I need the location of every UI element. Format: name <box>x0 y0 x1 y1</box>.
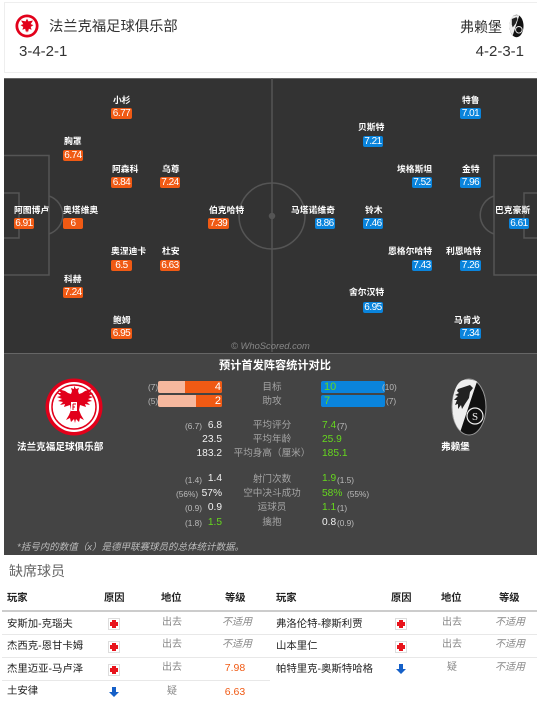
stat rows: 183.2 <box>196 448 222 459</box>
player: 奥涅迪卡: 奥涅迪卡 <box>111 246 146 256</box>
icon: Frankfurt crest large <box>46 378 102 436</box>
table: absent players left: 6.63 <box>225 686 245 698</box>
player: 乌尊 <box>160 164 180 188</box>
table: absent players right: 出去 <box>442 639 462 650</box>
stat rows: (1.8) <box>185 518 202 528</box>
table: absent players left: 杰里迈亚-马卢泽 <box>7 664 83 675</box>
panel: match header <box>4 2 537 73</box>
player: 马塔诺维奇: 马塔诺维奇 <box>291 205 335 215</box>
bar: away goals: 10 <box>324 381 336 393</box>
stat rows: (6.7) <box>185 421 202 431</box>
player: 舍尔汉特 <box>349 287 384 313</box>
stat rows: (56%) <box>176 489 198 499</box>
stat rows: 6.8 <box>208 420 222 431</box>
player: 杜安: 杜安 <box>162 246 180 256</box>
stat: bar labels: 目标 <box>262 382 282 393</box>
player: 胸罩: 6.74 <box>64 150 82 161</box>
player: 金特: 金特 <box>462 164 480 174</box>
icon: Freiburg crest large: S <box>472 411 478 423</box>
player: 鲍姆: 鲍姆 <box>113 315 131 325</box>
player: 胸罩: 胸罩 <box>64 136 82 146</box>
stat: bar labels: 助攻 <box>262 396 282 407</box>
table: absent players right: 帕特里克-奥斯特哈格 <box>276 664 373 675</box>
stat rows: (1) <box>337 503 347 513</box>
table: absent players right: 不适用 <box>495 662 525 673</box>
stat rows: (7) <box>337 421 347 431</box>
bar: away goals <box>321 381 385 393</box>
player: 特鲁: 7.01 <box>462 108 479 119</box>
stat rows: 平均身高（厘米） <box>234 448 310 459</box>
player: 乌尊: 乌尊 <box>162 164 180 174</box>
heading: absent players: 缺席球员 <box>9 563 65 579</box>
stat rows: 0.9 <box>208 502 222 513</box>
player: 奥塔维奥: 奥塔维奥 <box>63 205 98 215</box>
player: 铃木: 7.46 <box>364 218 382 229</box>
player: 恩格尔哈特 <box>388 246 432 271</box>
player: 伯克哈特: 伯克哈特 <box>209 205 244 215</box>
stat rows: (1.5) <box>337 475 354 485</box>
bar: away assists <box>321 395 385 407</box>
table: absent players left: 杰西克-恩甘卡姆 <box>7 641 83 652</box>
icon: Frankfurt crest small <box>16 14 38 38</box>
player: 马肯戈 <box>454 315 481 339</box>
table: absent players right: 疑 <box>447 662 457 673</box>
away formation: 4-2-3-1 <box>476 43 524 60</box>
table: absent players right: 玩家 <box>276 593 297 604</box>
player: 巴克豪斯: 6.61 <box>510 218 528 229</box>
watermark: © WhoScored.com <box>231 340 310 351</box>
stat rows: 1.9 <box>322 473 336 484</box>
player: 贝斯特 <box>358 122 384 147</box>
player: 埃格斯坦 <box>397 164 432 188</box>
pitch <box>4 78 537 353</box>
table: absent players left: 土安律 <box>7 686 38 697</box>
stat rows: 0.8 <box>322 517 336 528</box>
player: 利恩哈特 <box>446 246 481 271</box>
player: 杜安 <box>160 246 180 271</box>
table: absent players right: 不适用 <box>495 617 525 628</box>
player: 恩格尔哈特: 7.43 <box>413 260 431 271</box>
player: 马塔诺维奇 <box>291 205 335 229</box>
bar: away assists: 7 <box>324 395 330 407</box>
table: absent players right <box>270 592 537 675</box>
player: 舍尔汉特: 舍尔汉特 <box>349 287 384 297</box>
table: absent players right: 山本里仁 <box>276 641 318 652</box>
stat: bar labels: (7) <box>148 382 158 392</box>
player: 阿图博卢: 阿图博卢 <box>14 205 49 215</box>
player: 阿森科 <box>111 164 138 188</box>
stat rows: 185.1 <box>322 448 348 459</box>
icon: Freiburg crest small <box>509 14 524 38</box>
player: 阿森科: 6.84 <box>113 177 130 188</box>
player: 伯克哈特: 7.39 <box>210 218 227 229</box>
table: absent players right: 不适用 <box>495 639 525 650</box>
player: 奥塔维奥 <box>63 205 98 229</box>
table: absent players right: 原因 <box>391 593 412 604</box>
stat rows: 1.1 <box>322 502 336 513</box>
stat rows: 平均评分 <box>253 420 291 431</box>
player: 铃木: 铃木 <box>365 205 383 215</box>
player: 埃格斯坦: 7.52 <box>413 177 431 188</box>
player: 舍尔汉特: 6.95 <box>364 302 382 313</box>
stats title: 预计首发阵容统计对比 <box>219 360 331 372</box>
stat: bar labels: (10) <box>382 382 397 392</box>
player: 阿森科: 阿森科 <box>112 164 138 174</box>
stat: bar labels: (5) <box>148 396 158 406</box>
player: 科赫 <box>63 274 83 298</box>
player: 科赫: 科赫 <box>64 274 82 284</box>
table: absent players left: 原因 <box>104 593 125 604</box>
player: 巴克豪斯: 巴克豪斯 <box>495 205 530 215</box>
stat rows: 1.5 <box>208 517 222 528</box>
stat rows: (0.9) <box>337 518 354 528</box>
player: 奥涅迪卡 <box>111 246 146 271</box>
player: 埃格斯坦: 埃格斯坦 <box>397 164 432 174</box>
table: absent players left: 出去 <box>162 662 182 673</box>
player: 特鲁 <box>460 95 481 119</box>
table: absent players right: 出去 <box>442 617 462 628</box>
player: 胸罩 <box>63 136 83 161</box>
player: 乌尊: 7.24 <box>161 177 179 188</box>
player: 贝斯特: 贝斯特 <box>358 122 384 132</box>
stat rows: (0.9) <box>185 503 202 513</box>
stat rows: 57% <box>202 488 222 499</box>
player: 伯克哈特 <box>208 205 244 229</box>
stat rows: (1.4) <box>185 475 202 485</box>
bar: home goals: 4 <box>215 381 221 393</box>
table: absent players left: 出去 <box>162 639 182 650</box>
player: 马肯戈: 马肯戈 <box>454 315 480 325</box>
stat rows: 运球员 <box>258 502 286 513</box>
icon: down arrow <box>109 687 119 697</box>
table: absent players right: 地位 <box>441 593 462 604</box>
player: 科赫: 7.24 <box>64 287 82 298</box>
stat rows: 空中决斗成功 <box>243 488 301 499</box>
table: absent players left: 安斯加-克瑙夫 <box>7 619 73 630</box>
stat: bar labels: (7) <box>386 396 396 406</box>
player: 铃木 <box>363 205 383 229</box>
player: 鲍姆: 6.95 <box>113 328 130 339</box>
stat rows: 平均年龄 <box>253 434 291 445</box>
table: absent players left: 不适用 <box>222 639 252 650</box>
player: 金特: 7.96 <box>462 177 479 188</box>
table: absent players right: 等级 <box>499 593 520 604</box>
home team name: 法兰克福足球俱乐部 <box>49 19 178 35</box>
player: 恩格尔哈特: 恩格尔哈特 <box>388 246 432 256</box>
table: absent players left: 疑 <box>167 686 177 697</box>
player: 马肯戈: 7.34 <box>462 328 479 339</box>
player: 奥涅迪卡: 6.5 <box>115 260 128 271</box>
table: absent players left: 玩家 <box>7 593 28 604</box>
footnote: *括号内的数值（x）是德甲联赛球员的总体统计数据。 <box>17 542 244 553</box>
player: 小杉: 6.77 <box>113 108 130 119</box>
table: absent players left: 7.98 <box>225 662 245 674</box>
player: 小杉 <box>111 95 132 119</box>
table: absent players left <box>2 592 270 698</box>
icon: Freiburg crest large <box>452 378 486 436</box>
player: 金特 <box>460 164 481 188</box>
bar: home assists: 2 <box>215 395 221 407</box>
stat rows <box>176 420 369 528</box>
stat rows: 25.9 <box>322 434 342 445</box>
player: 小杉: 小杉 <box>113 95 131 105</box>
icon: down arrow <box>396 664 406 674</box>
pitch lines <box>4 78 537 352</box>
stat rows: 7.4 <box>322 420 336 431</box>
stat rows: 23.5 <box>202 434 222 445</box>
player: 巴克豪斯 <box>495 205 530 229</box>
stat rows: 射门次数 <box>253 474 291 485</box>
panel: stats comparison <box>4 353 537 555</box>
player: 阿图博卢 <box>14 205 49 229</box>
bar: home assists <box>158 395 222 407</box>
player: 利恩哈特: 7.26 <box>462 260 479 271</box>
table: absent players right: 弗洛伦特-穆斯利贾 <box>276 619 363 630</box>
player: 贝斯特: 7.21 <box>364 136 382 147</box>
player: 奥塔维奥: 6 <box>70 218 76 229</box>
table: absent players left: 等级 <box>225 593 246 604</box>
table: absent players left: 地位 <box>161 593 182 604</box>
stat rows: 1.4 <box>208 473 222 484</box>
player: 阿图博卢: 6.91 <box>15 218 33 229</box>
away crest label: 弗赖堡 <box>441 442 470 453</box>
table: absent players left: 不适用 <box>222 617 252 628</box>
home crest label: 法兰克福足球俱乐部 <box>17 442 103 453</box>
player: 利恩哈特: 利恩哈特 <box>446 246 481 256</box>
stat: bar labels <box>148 382 397 407</box>
player: 马塔诺维奇: 8.86 <box>316 218 334 229</box>
player: 鲍姆 <box>111 315 132 339</box>
stat rows: (55%) <box>347 489 369 499</box>
bar: home goals <box>158 381 222 393</box>
stat rows: 擒抱 <box>262 517 282 528</box>
table: absent players left: 出去 <box>162 617 182 628</box>
stat rows: 58% <box>322 488 342 499</box>
player: 特鲁: 特鲁 <box>462 95 480 105</box>
home formation: 3-4-2-1 <box>19 43 67 60</box>
away team name: 弗赖堡 <box>460 19 502 35</box>
player: 杜安: 6.63 <box>161 260 179 271</box>
